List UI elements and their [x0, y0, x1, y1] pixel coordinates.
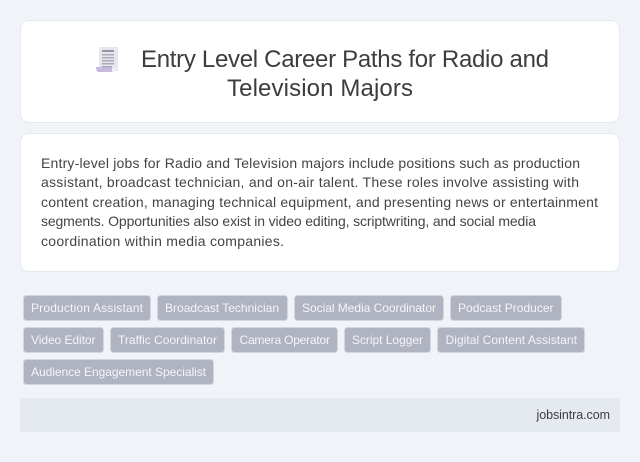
- tag: Production Assistant: [24, 296, 150, 320]
- text block: description: content creation, managing technical equipment, and presenting news or entertainment: [41, 194, 598, 210]
- tag: Traffic Coordinator: [110, 328, 224, 352]
- text block: description: [41, 155, 598, 249]
- tags: [24, 296, 584, 384]
- panel: title card: [20, 20, 620, 122]
- tag: Traffic Coordinator: Traffic Coordinator: [118, 333, 217, 347]
- title: [141, 46, 549, 102]
- text block: description: Entry-level jobs for Radio and Television majors include positions such as production: [41, 155, 580, 171]
- tag: Camera Operator: Camera Operator: [240, 333, 330, 347]
- tag: Script Logger: Script Logger: [352, 333, 423, 347]
- panel: description: [20, 134, 620, 272]
- tag: Social Media Coordinator: [294, 296, 444, 320]
- tag: Camera Operator: [232, 328, 338, 352]
- tag: Audience Engagement Specialist: [24, 360, 214, 384]
- tag: Podcast Producer: Podcast Producer: [458, 301, 554, 315]
- tag: Broadcast Technician: [158, 296, 288, 320]
- tag: Script Logger: [344, 328, 430, 352]
- tag: Digital Content Assistant: Digital Content Assistant: [446, 333, 578, 347]
- footer: [20, 398, 620, 432]
- icon: document scroll: [96, 47, 118, 72]
- tag: Production Assistant: Production Assistant: [31, 301, 144, 315]
- tag: Video Editor: Video Editor: [31, 333, 96, 347]
- tag: Podcast Producer: [450, 296, 562, 320]
- text block: description: coordination within media companies.: [41, 233, 284, 249]
- tag: Video Editor: [24, 328, 104, 352]
- title: Television Majors: [227, 75, 413, 102]
- text block: description: assistant, broadcast technician, and on-air talent. These roles involve assisting with: [41, 174, 579, 190]
- tag: Audience Engagement Specialist: Audience Engagement Specialist: [31, 365, 207, 379]
- tag: Digital Content Assistant: [438, 328, 584, 352]
- tag: Broadcast Technician: Broadcast Technician: [165, 301, 279, 315]
- title: Entry Level Career Paths for Radio and: [141, 46, 549, 73]
- footer source: jobsintra.com: [536, 408, 610, 422]
- tag: Social Media Coordinator: Social Media Coordinator: [302, 301, 436, 315]
- text block: description: segments. Opportunities also exist in video editing, scriptwriting, and social media: [41, 213, 536, 229]
